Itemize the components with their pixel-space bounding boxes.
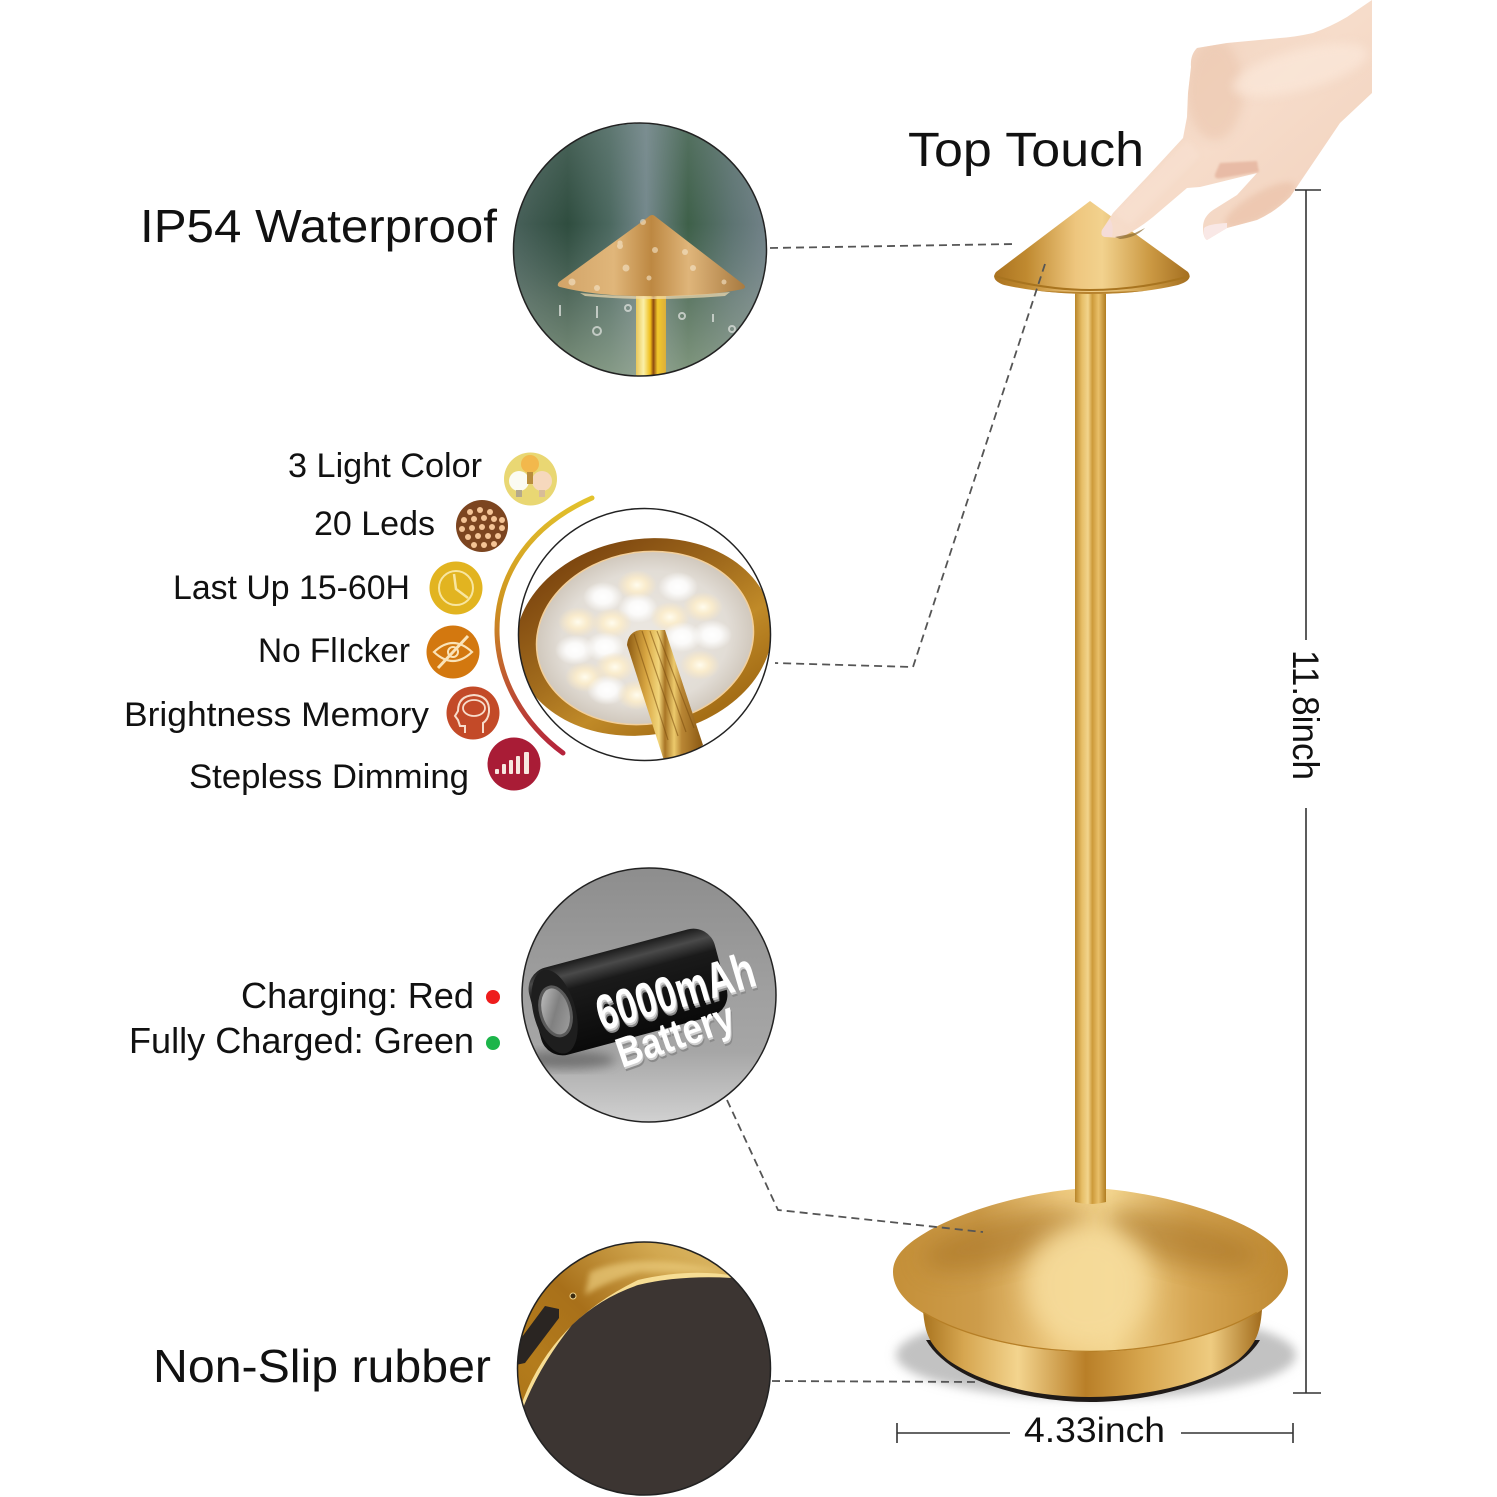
base rubber foot	[926, 1340, 1260, 1402]
feature: Brightness Memory: Brightness Memory	[124, 696, 429, 734]
feature: No Flicker	[258, 626, 480, 678]
circle outline	[522, 868, 776, 1122]
label: Non-Slip rubber: Non-Slip rubber	[153, 1340, 491, 1392]
feature: 20 Leds: 20 Leds	[314, 505, 435, 543]
index nail	[1101, 219, 1113, 237]
circle outline	[518, 508, 770, 760]
feature list	[124, 447, 557, 796]
panel: light features	[124, 447, 787, 796]
lamp: base	[890, 1185, 1292, 1402]
feature: 20 Leds	[314, 500, 508, 552]
feature: Last Up 15-60H	[173, 562, 482, 614]
hand touching the lamp	[1095, 0, 1375, 245]
circle outline	[514, 123, 766, 376]
finger shadow	[1115, 228, 1145, 239]
base dome	[890, 1185, 1292, 1355]
feature: Stepless Dimming	[189, 738, 540, 796]
photo: rainy lamp shade	[510, 120, 772, 380]
feature: No Flicker: No FlIcker	[258, 632, 410, 670]
battery body	[528, 928, 728, 1056]
feature: Brightness Memory	[124, 686, 500, 740]
base rim	[923, 1310, 1262, 1397]
label: 4.33inch: 4.33inch	[1024, 1411, 1165, 1450]
label: charging red: Charging: Red	[241, 975, 474, 1016]
panel: non-slip rubber	[153, 1240, 800, 1497]
label: IP54 Waterproof: IP54 Waterproof	[140, 200, 497, 252]
photo: LEDs under shade	[519, 538, 770, 758]
battery text: 6000mAh	[589, 942, 761, 1042]
battery text	[596, 954, 758, 1072]
feature: 3 Light Color	[288, 447, 557, 506]
lamp: floor shadow	[896, 1311, 1296, 1399]
stem collar	[1075, 1186, 1106, 1204]
photo: rubber pad	[518, 1242, 770, 1494]
lamp: stem	[1075, 290, 1106, 1206]
gap between fingers	[1215, 161, 1259, 178]
charging status	[129, 975, 500, 1061]
dashed leader lines	[727, 244, 1045, 1382]
charging port	[516, 1306, 559, 1365]
panel: battery	[129, 866, 780, 1124]
feature: 3 Light Color: 3 Light Color	[288, 447, 482, 485]
heading: top touch: Top Touch	[908, 124, 1144, 177]
feature: Stepless Dimming: Stepless Dimming	[189, 758, 469, 796]
green indicator	[486, 1036, 500, 1050]
photo: 6000mAh battery	[515, 866, 780, 1124]
ribbed stem	[627, 630, 703, 770]
LED lights	[555, 570, 732, 710]
red indicator	[486, 990, 500, 1004]
label: 11.8inch: 11.8inch	[1285, 650, 1326, 780]
panel: IP54 waterproof	[140, 120, 772, 380]
battery text: Battery	[610, 992, 741, 1077]
label: fully charged green: Fully Charged: Green	[129, 1020, 474, 1061]
circle outline	[518, 1242, 770, 1495]
feature: Last Up 15-60H: Last Up 15-60H	[173, 569, 410, 607]
lamp: shade	[994, 201, 1190, 294]
gradient arc	[497, 498, 592, 753]
thumb nail	[1204, 223, 1227, 240]
